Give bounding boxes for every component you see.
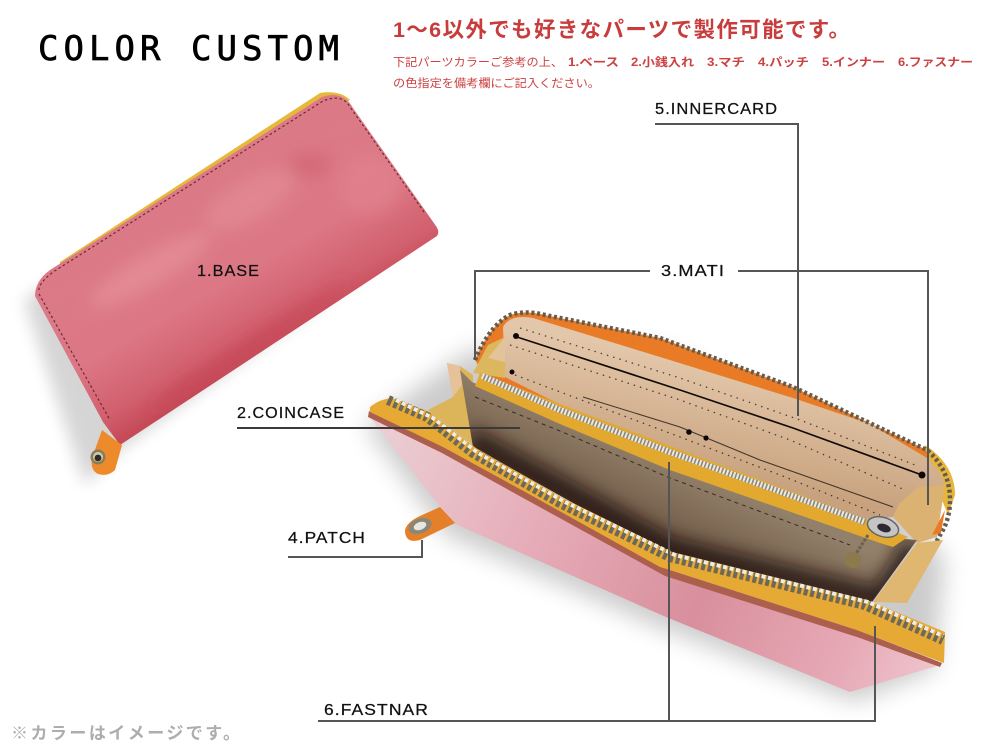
patch leader <box>288 540 422 557</box>
instructions text: 5.インナー <box>822 56 885 69</box>
part labels <box>197 101 778 719</box>
left gussets <box>428 337 505 445</box>
instructions text: 6.ファスナー <box>898 56 973 69</box>
pouch stitching <box>475 397 850 545</box>
front zipper teeth <box>388 400 943 640</box>
pouch dark shading <box>470 440 915 600</box>
coincase leader <box>237 427 520 429</box>
mati leader <box>475 271 928 505</box>
beige inner card <box>503 317 945 520</box>
open wallet <box>365 312 955 702</box>
front pink leather <box>368 415 940 692</box>
back zipper teeth <box>475 312 950 600</box>
orange sliver <box>932 510 945 535</box>
closed wallet stitching <box>39 98 424 420</box>
coin pouch zipper tape <box>475 373 908 547</box>
label 1 base: 1.BASE <box>197 263 260 280</box>
patch tab <box>405 507 455 541</box>
coin pouch <box>460 370 917 602</box>
coin pouch zipper teeth <box>482 376 865 522</box>
title: COLOR CUSTOM <box>38 29 339 69</box>
closed wallet <box>24 92 438 485</box>
closed wallet patch tab <box>92 430 122 475</box>
open wallet shadow <box>365 350 945 702</box>
closed wallet zipper edge <box>60 92 350 280</box>
footer note: ※カラーはイメージです。 <box>11 724 240 743</box>
label 3 mati: 3.MATI <box>661 263 725 280</box>
instructions text: 4.パッチ <box>758 56 809 69</box>
zipper puller <box>845 513 901 568</box>
card slots <box>510 328 922 515</box>
leader lines <box>237 124 928 721</box>
instructions text: 下記パーツカラーご参考の上、 <box>393 55 563 69</box>
closed wallet leather body <box>35 95 438 445</box>
yellow corner edge <box>925 445 955 515</box>
brown leather edge <box>368 411 942 667</box>
patch eyelet <box>406 515 434 537</box>
instructions text: 2.小銭入れ <box>631 55 695 69</box>
instructions text: 1.ベース <box>568 57 619 69</box>
innercard leader <box>655 124 798 416</box>
leather mottling <box>94 154 384 388</box>
card slot holes <box>510 333 926 478</box>
instructions text: 3.マチ <box>707 56 745 69</box>
closed wallet shadow <box>24 110 410 485</box>
yellow zipper tape <box>370 398 945 663</box>
orange back gusset <box>475 312 945 500</box>
fastnar leader <box>318 462 875 721</box>
label 2 coincase: 2.COINCASE <box>237 405 345 422</box>
closed wallet eyelet <box>90 450 106 464</box>
instructions text <box>393 55 973 90</box>
label 4 patch: 4.PATCH <box>288 530 366 547</box>
red heading: 1～6以外でも好きなパーツで製作可能です。 <box>393 18 850 42</box>
right gusset upper <box>893 485 945 543</box>
right gusset lower <box>873 540 943 603</box>
label 5 innercard: 5.INNERCARD <box>655 101 778 118</box>
instructions text: の色指定を備考欄にご記入ください。 <box>393 76 600 90</box>
label 6 fastnar: 6.FASTNAR <box>324 702 429 719</box>
